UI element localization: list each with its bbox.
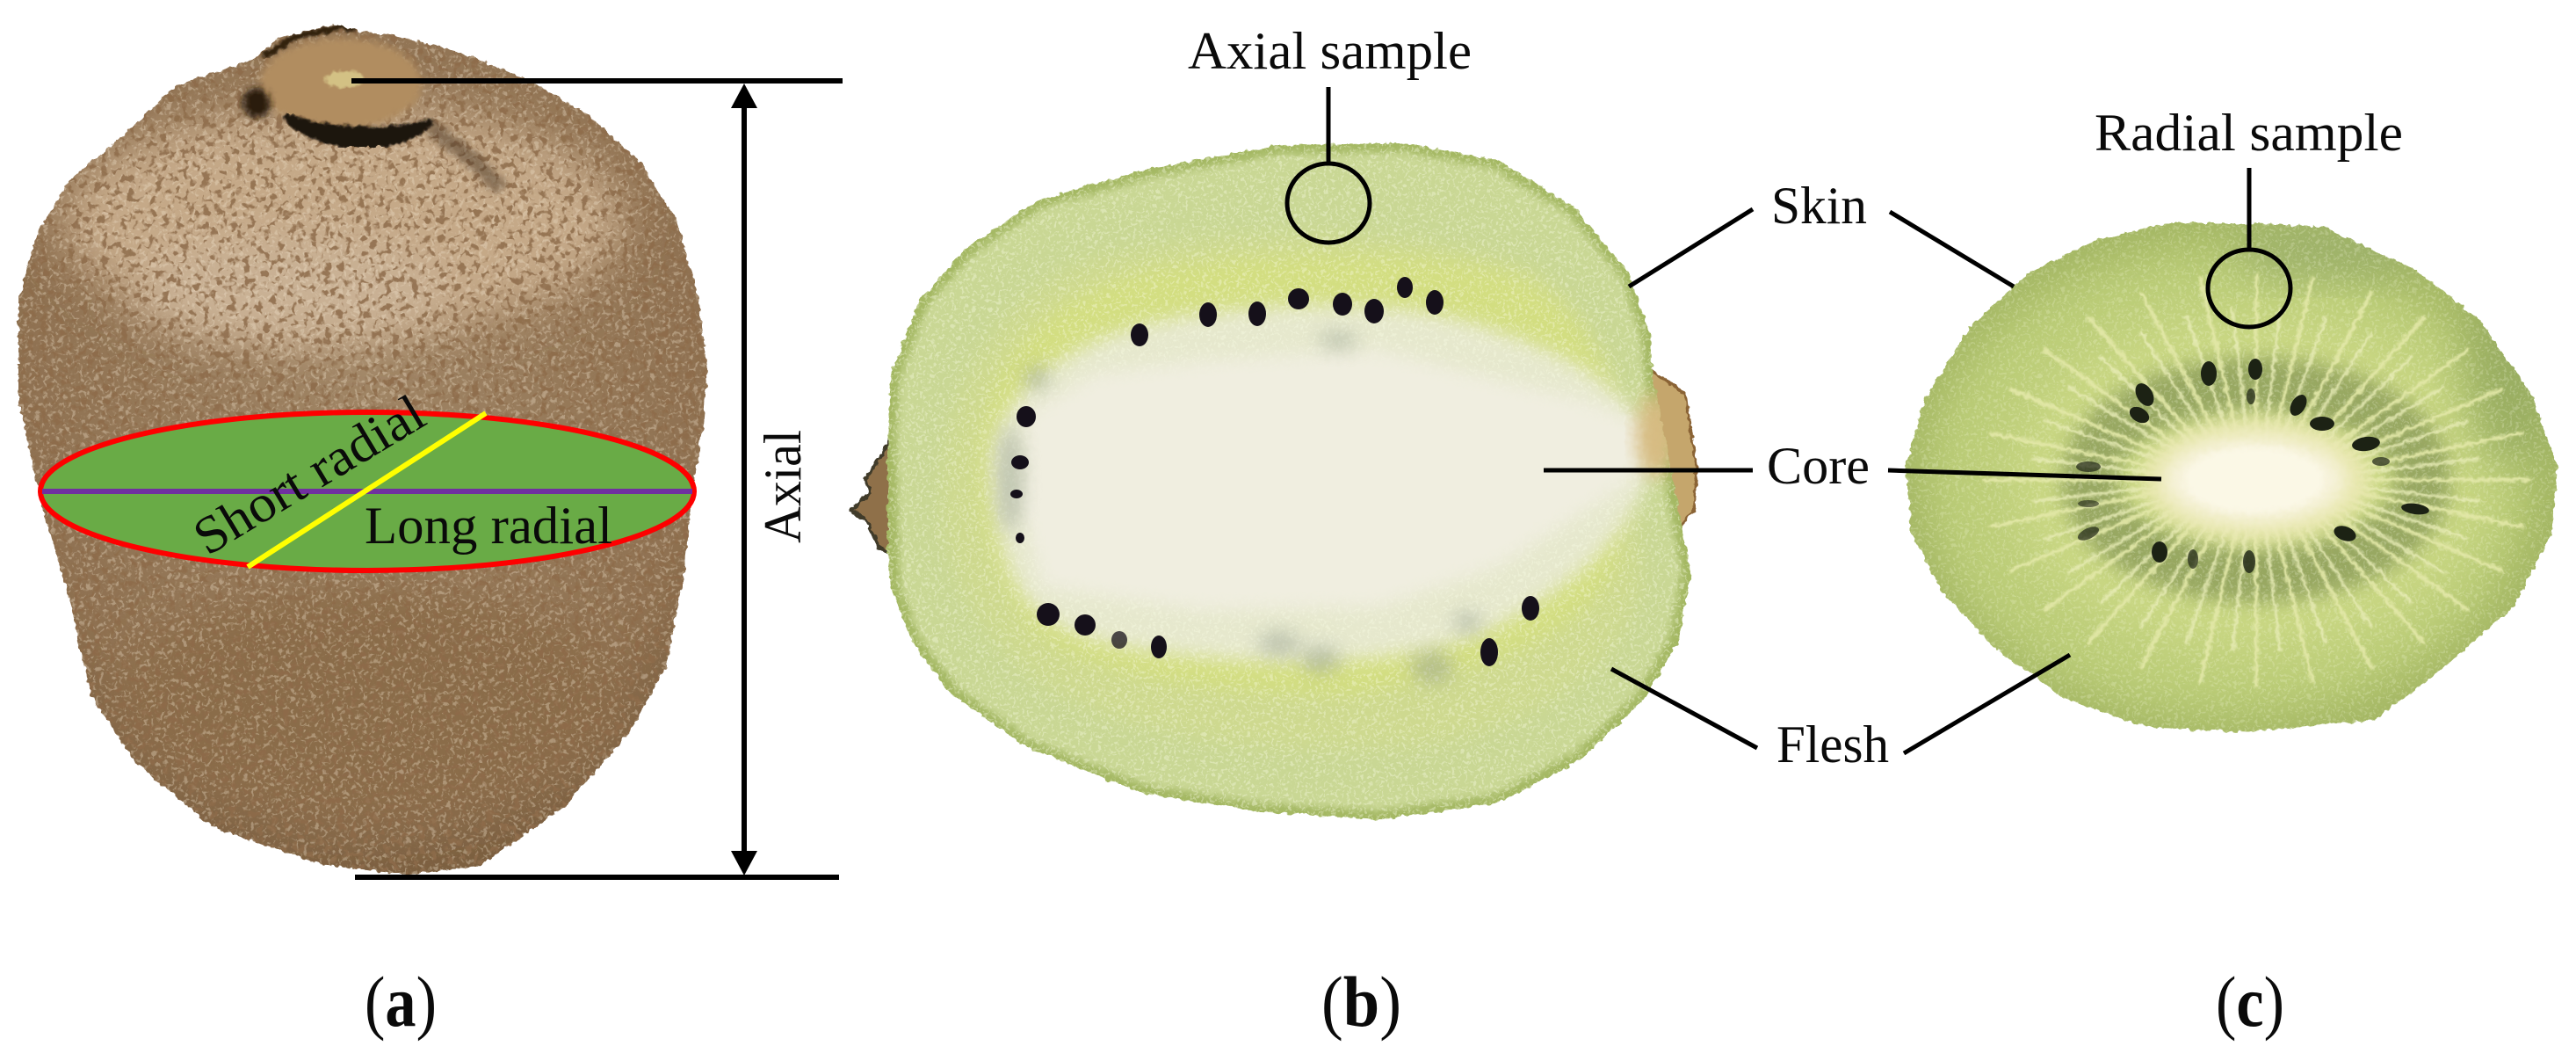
seeds: axial section xyxy=(1010,277,1539,666)
panel b: axial section xyxy=(843,22,1722,1042)
diagram: cross-section ellipse xyxy=(40,383,694,570)
panel c: radial section xyxy=(1889,104,2574,1042)
stem end, right xyxy=(1634,369,1697,527)
short radial line xyxy=(248,413,486,567)
label: short radial: Short radial xyxy=(184,383,435,566)
stem scar xyxy=(260,38,422,129)
dark seed ring xyxy=(2089,385,2423,575)
photo: radial slice xyxy=(1889,211,2574,747)
seeds: radial section xyxy=(2076,359,2430,573)
long radial line xyxy=(42,489,692,494)
label: radial sample: Radial sample xyxy=(2095,104,2403,162)
radial rays xyxy=(1984,273,2529,686)
pale halo around core xyxy=(2142,418,2370,541)
stem end, left xyxy=(850,439,892,556)
callout: skin xyxy=(1629,177,2014,287)
label: axial sample: Axial sample xyxy=(1188,22,1472,80)
grey seed-zone smudges xyxy=(998,331,1481,683)
core xyxy=(2163,436,2346,524)
caption b: (b) xyxy=(1321,962,1401,1042)
label: long radial: Long radial xyxy=(365,497,612,555)
photo: axial flesh xyxy=(886,142,1692,821)
pith core xyxy=(1020,350,1652,610)
callout: core xyxy=(1544,437,2161,495)
photo: fuzzy kiwifruit skin xyxy=(0,0,729,888)
secondary radial rays xyxy=(2034,309,2478,650)
radial sample circle and leader xyxy=(2208,168,2290,327)
axial dimension lines and arrow xyxy=(351,81,843,877)
shared callouts: skin, core, flesh xyxy=(1544,177,2161,774)
axial sample circle and leader xyxy=(1287,87,1370,243)
panel a: whole kiwifruit xyxy=(0,0,843,1042)
label: axial: Axial xyxy=(754,430,812,543)
callout: core: Core xyxy=(1767,437,1870,495)
callout: flesh xyxy=(1611,655,2070,774)
caption c: (c) xyxy=(2216,962,2284,1042)
caption a: (a) xyxy=(365,962,437,1042)
callout: flesh: Flesh xyxy=(1776,715,1889,774)
callout: skin: Skin xyxy=(1771,177,1867,235)
